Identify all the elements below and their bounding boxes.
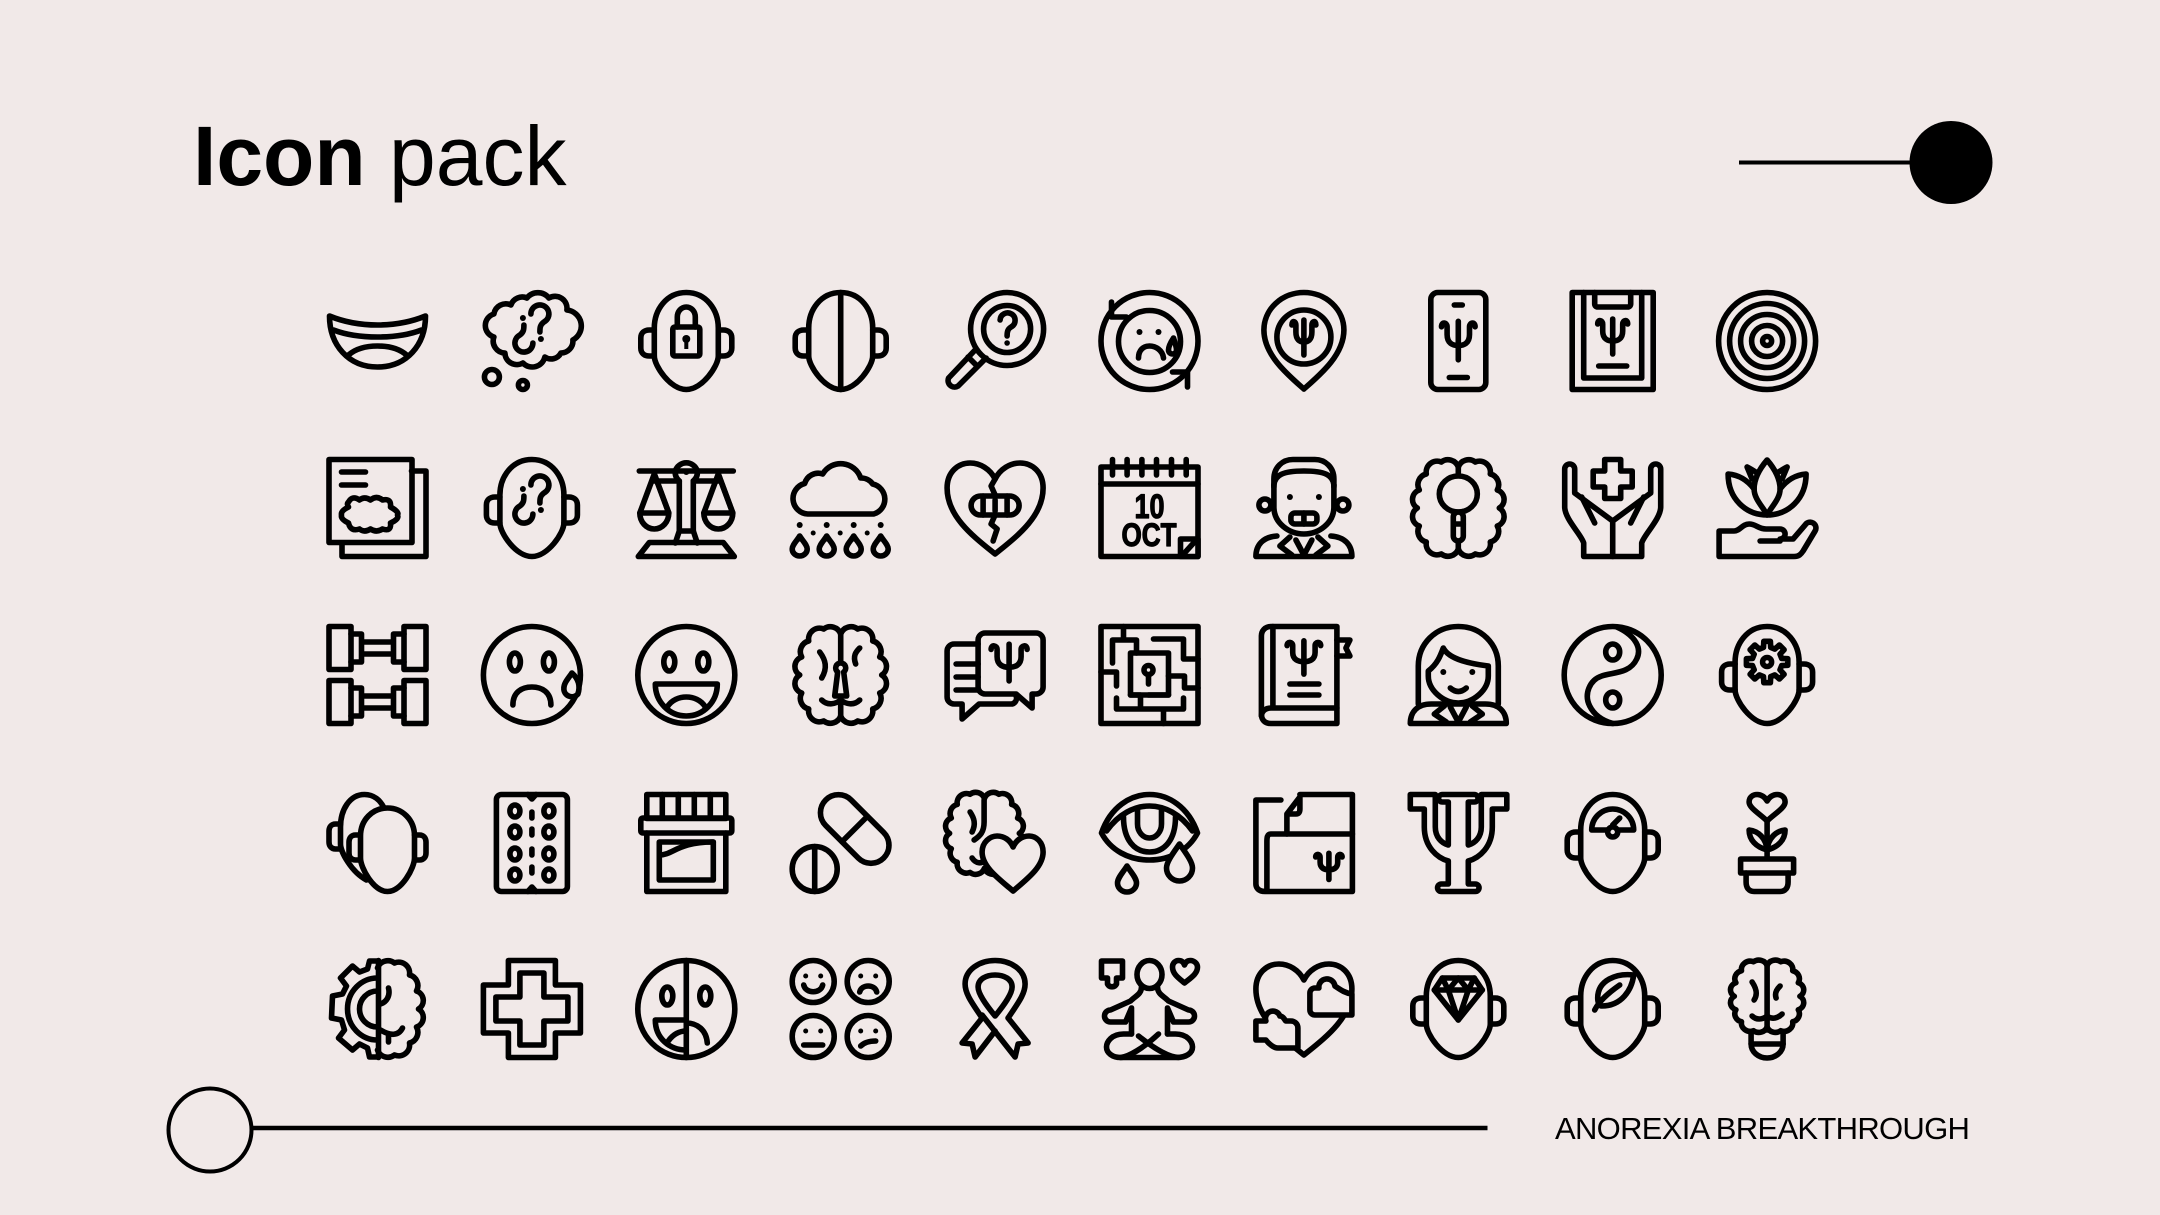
- icon: book with psi: [1261, 626, 1350, 724]
- icon: head with question marks: [486, 460, 577, 556]
- icon: medical cross: [483, 960, 580, 1058]
- icon: folder with psi: [1256, 794, 1352, 892]
- icon: brain and heart: [946, 792, 1043, 891]
- icon: female psychologist: [1410, 626, 1506, 724]
- icon: head with diamond: [1413, 960, 1504, 1058]
- icon grid: [329, 292, 1816, 1058]
- icon: head with gauge: [1567, 794, 1658, 892]
- icon: awareness ribbon: [962, 960, 1028, 1057]
- icon: phone with psi: [1431, 292, 1486, 390]
- icon: capsule and tablet: [792, 787, 896, 892]
- icon: happy laughing face: [638, 626, 735, 724]
- icon: heart flower in pot: [1741, 794, 1794, 892]
- icon: blister pack of pills: [496, 794, 567, 892]
- icon: four mood faces: [792, 960, 889, 1058]
- icon: thought cloud with question marks: [484, 293, 581, 390]
- icon: clipboard with psi: [1572, 292, 1653, 390]
- icon: brain with magnifier: [1413, 460, 1504, 556]
- icon: chat bubbles with psi: [947, 633, 1043, 719]
- icon: two overlapping heads: [329, 794, 426, 892]
- icon: large psi symbol: [1410, 794, 1507, 892]
- icon: half happy half sad face: [638, 960, 735, 1058]
- icon: rain cloud with drops: [792, 464, 888, 556]
- icon: documents with cloud: [329, 460, 426, 556]
- icon: scales of justice: [638, 463, 734, 556]
- icon: head with gear: [1722, 626, 1813, 724]
- decoration: bottom outlined circle with line: [168, 1088, 1488, 1172]
- icon: location pin with psi: [1264, 292, 1344, 389]
- icon: yin yang: [1564, 626, 1661, 724]
- icon: mouth: [330, 316, 426, 367]
- decoration: top right line with filled circle: [1739, 121, 1992, 204]
- icon: medicine jar: [641, 794, 732, 892]
- icon: lotus on hand: [1719, 460, 1816, 556]
- icon: brain light bulb: [1730, 960, 1804, 1058]
- footer label: ANOREXIA BREAKTHROUGH: [1555, 1111, 1969, 1146]
- icon: half gear half brain: [332, 960, 423, 1058]
- title: Icon pack: [193, 109, 567, 203]
- icon: maze with keyhole: [1101, 626, 1198, 724]
- icon: split head: [795, 292, 886, 390]
- icon: sad face with tear: [483, 626, 580, 724]
- icon: dumbbells: [329, 626, 426, 724]
- icon: sad face in cycle: [1101, 292, 1198, 390]
- icon: calendar 10 OCT: OCT: [1122, 517, 1177, 553]
- icon: crying eye: [1102, 794, 1198, 892]
- icon: meditating person: [1102, 960, 1198, 1058]
- icon: heart with clouds: [1256, 964, 1352, 1055]
- icon: concentric target: [1719, 292, 1816, 390]
- icon: head with leaf: [1567, 960, 1658, 1058]
- icon: male psychologist: [1256, 460, 1352, 556]
- icon: calendar 10 OCT: [1101, 460, 1198, 556]
- icon: head with padlock: [641, 292, 732, 390]
- icon: hands holding medical cross: [1565, 460, 1661, 556]
- icon: brain with keyhole: [795, 627, 886, 723]
- icon: calendar 10 OCT: 10: [1134, 488, 1164, 526]
- icon: broken heart with bandage: [947, 463, 1043, 554]
- icon: magnifier with question mark: [948, 292, 1044, 387]
